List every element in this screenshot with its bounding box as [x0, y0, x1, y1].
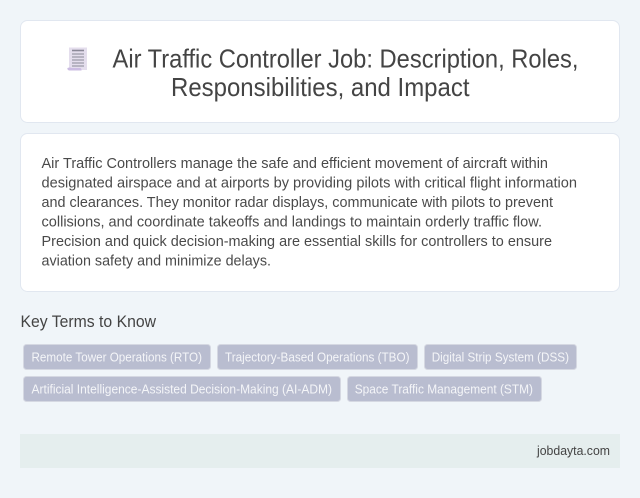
chip: RTO: Remote Tower Operations (RTO): [32, 350, 202, 364]
description text: aviation safety and minimize delays.: [42, 252, 271, 270]
description text: collisions, and coordinate takeoffs and landings to maintain orderly traffic flow.: [42, 214, 542, 230]
chip: AI-ADM: Artificial Intelligence-Assisted Decision-Making (AI-ADM): [32, 382, 332, 396]
description text: and clearances. They monitor radar displays, communicate with pilots to prevent: [42, 194, 554, 211]
description text: Air Traffic Controllers manage the safe and efficient movement of aircraft within: [42, 155, 548, 172]
chip: STM: Space Traffic Management (STM): [355, 382, 533, 396]
chip: AI-ADM: [24, 376, 340, 402]
title: [112, 44, 578, 102]
title: Air Traffic Controller Job: Description, Roles,: [112, 44, 578, 74]
panel: header card: [20, 20, 620, 122]
key term chips: [24, 344, 576, 402]
chip: DSS: [424, 344, 576, 370]
chip: DSS: Digital Strip System (DSS): [432, 350, 569, 364]
description text: Precision and quick decision-making are essential skills for controllers to ensure: [42, 233, 552, 250]
chip: TBO: [218, 344, 418, 370]
heading: key terms: Key Terms to Know: [20, 312, 157, 331]
chip: TBO: Trajectory-Based Operations (TBO): [225, 350, 410, 364]
chip: RTO: [24, 344, 210, 370]
icon: document: [67, 48, 87, 70]
description text: designated airspace and at airports by providing pilots with critical flight information: [42, 174, 577, 192]
chip: STM: [348, 376, 542, 402]
description text: [42, 155, 577, 270]
title: Responsibilities, and Impact: [171, 72, 470, 102]
footer bar: [20, 434, 620, 468]
footer source text: jobdayta.com: [536, 444, 610, 458]
panel: description card: [20, 134, 620, 292]
